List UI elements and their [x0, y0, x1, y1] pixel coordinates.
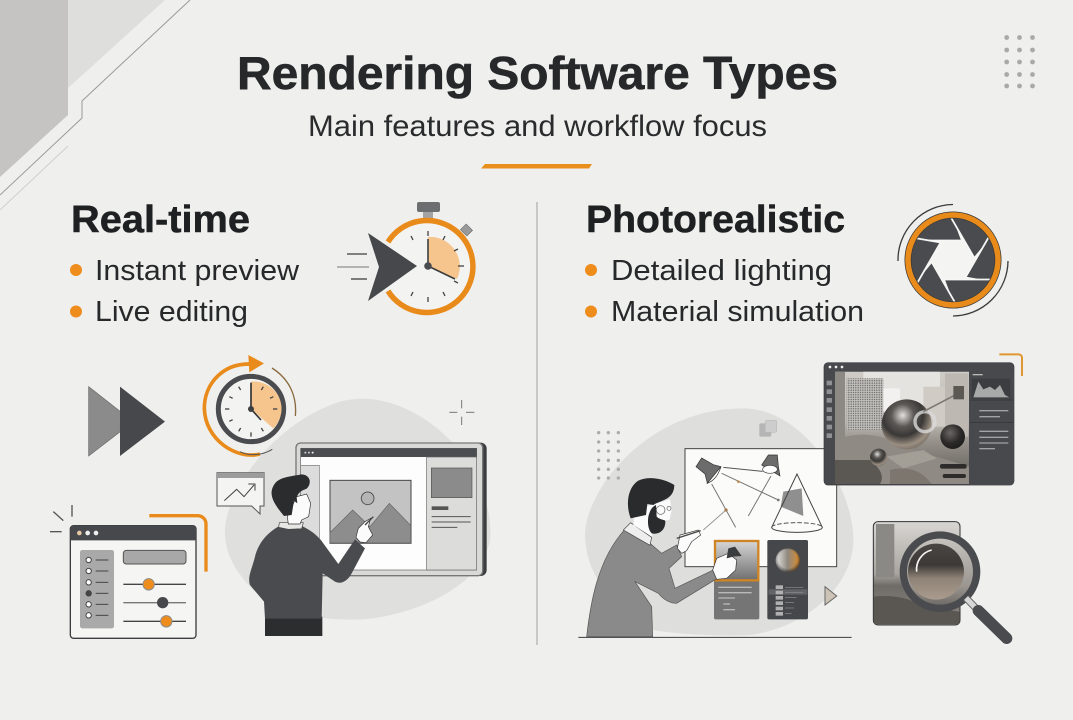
figure: bearded man	[587, 478, 742, 637]
bullet list: real-time	[70, 255, 299, 328]
dot grid: top right	[1004, 35, 1035, 88]
heading: photorealistic: Photorealistic	[586, 199, 845, 241]
bullet list: photorealistic: Detailed lighting	[611, 255, 832, 287]
floor line	[578, 636, 852, 639]
magnifier over material sample	[873, 522, 1007, 638]
corner decoration	[0, 0, 190, 210]
icon: stopwatch	[337, 202, 473, 312]
spark lines	[50, 505, 72, 532]
subtitle: Main features and workflow focus	[308, 110, 767, 143]
figure: man at monitor	[249, 474, 373, 636]
icon: camera aperture	[897, 204, 1009, 317]
icon: fast forward	[89, 387, 165, 456]
scene: real-time workflow (drawn in 3x coordinates)	[50, 355, 490, 638]
icon: clock with arrow	[204, 355, 296, 455]
lighting diagram board	[685, 449, 837, 567]
title accent underline	[481, 164, 592, 168]
bullet list: photorealistic	[585, 255, 864, 328]
icon: chart bubble	[217, 473, 264, 514]
title: Rendering Software Types	[237, 47, 838, 99]
bullet list: real-time: Instant preview	[95, 255, 299, 287]
scene: photorealistic workflow (drawn in 3x coordinates)	[578, 354, 1022, 638]
orange corner accent	[149, 516, 206, 572]
dot grid	[597, 431, 620, 480]
rendered image	[835, 372, 969, 484]
bullet list: photorealistic: Material simulation	[611, 296, 864, 328]
monitor	[296, 443, 487, 576]
icon: sparkle	[449, 400, 474, 425]
center divider	[536, 202, 538, 645]
play triangle	[825, 587, 837, 605]
bullet list: real-time: Live editing	[95, 296, 248, 328]
render window	[824, 363, 1014, 485]
icon: layers	[759, 420, 777, 437]
orange corner accent	[999, 354, 1022, 376]
heading: real-time: Real-time	[71, 199, 250, 241]
background blob	[225, 399, 490, 620]
material card: sphere	[767, 540, 808, 619]
panel: real-time	[50, 199, 490, 638]
material card: selected	[714, 540, 759, 619]
panel: photorealistic	[578, 195, 1022, 638]
UI control panel	[70, 526, 196, 638]
background blob	[585, 408, 853, 635]
